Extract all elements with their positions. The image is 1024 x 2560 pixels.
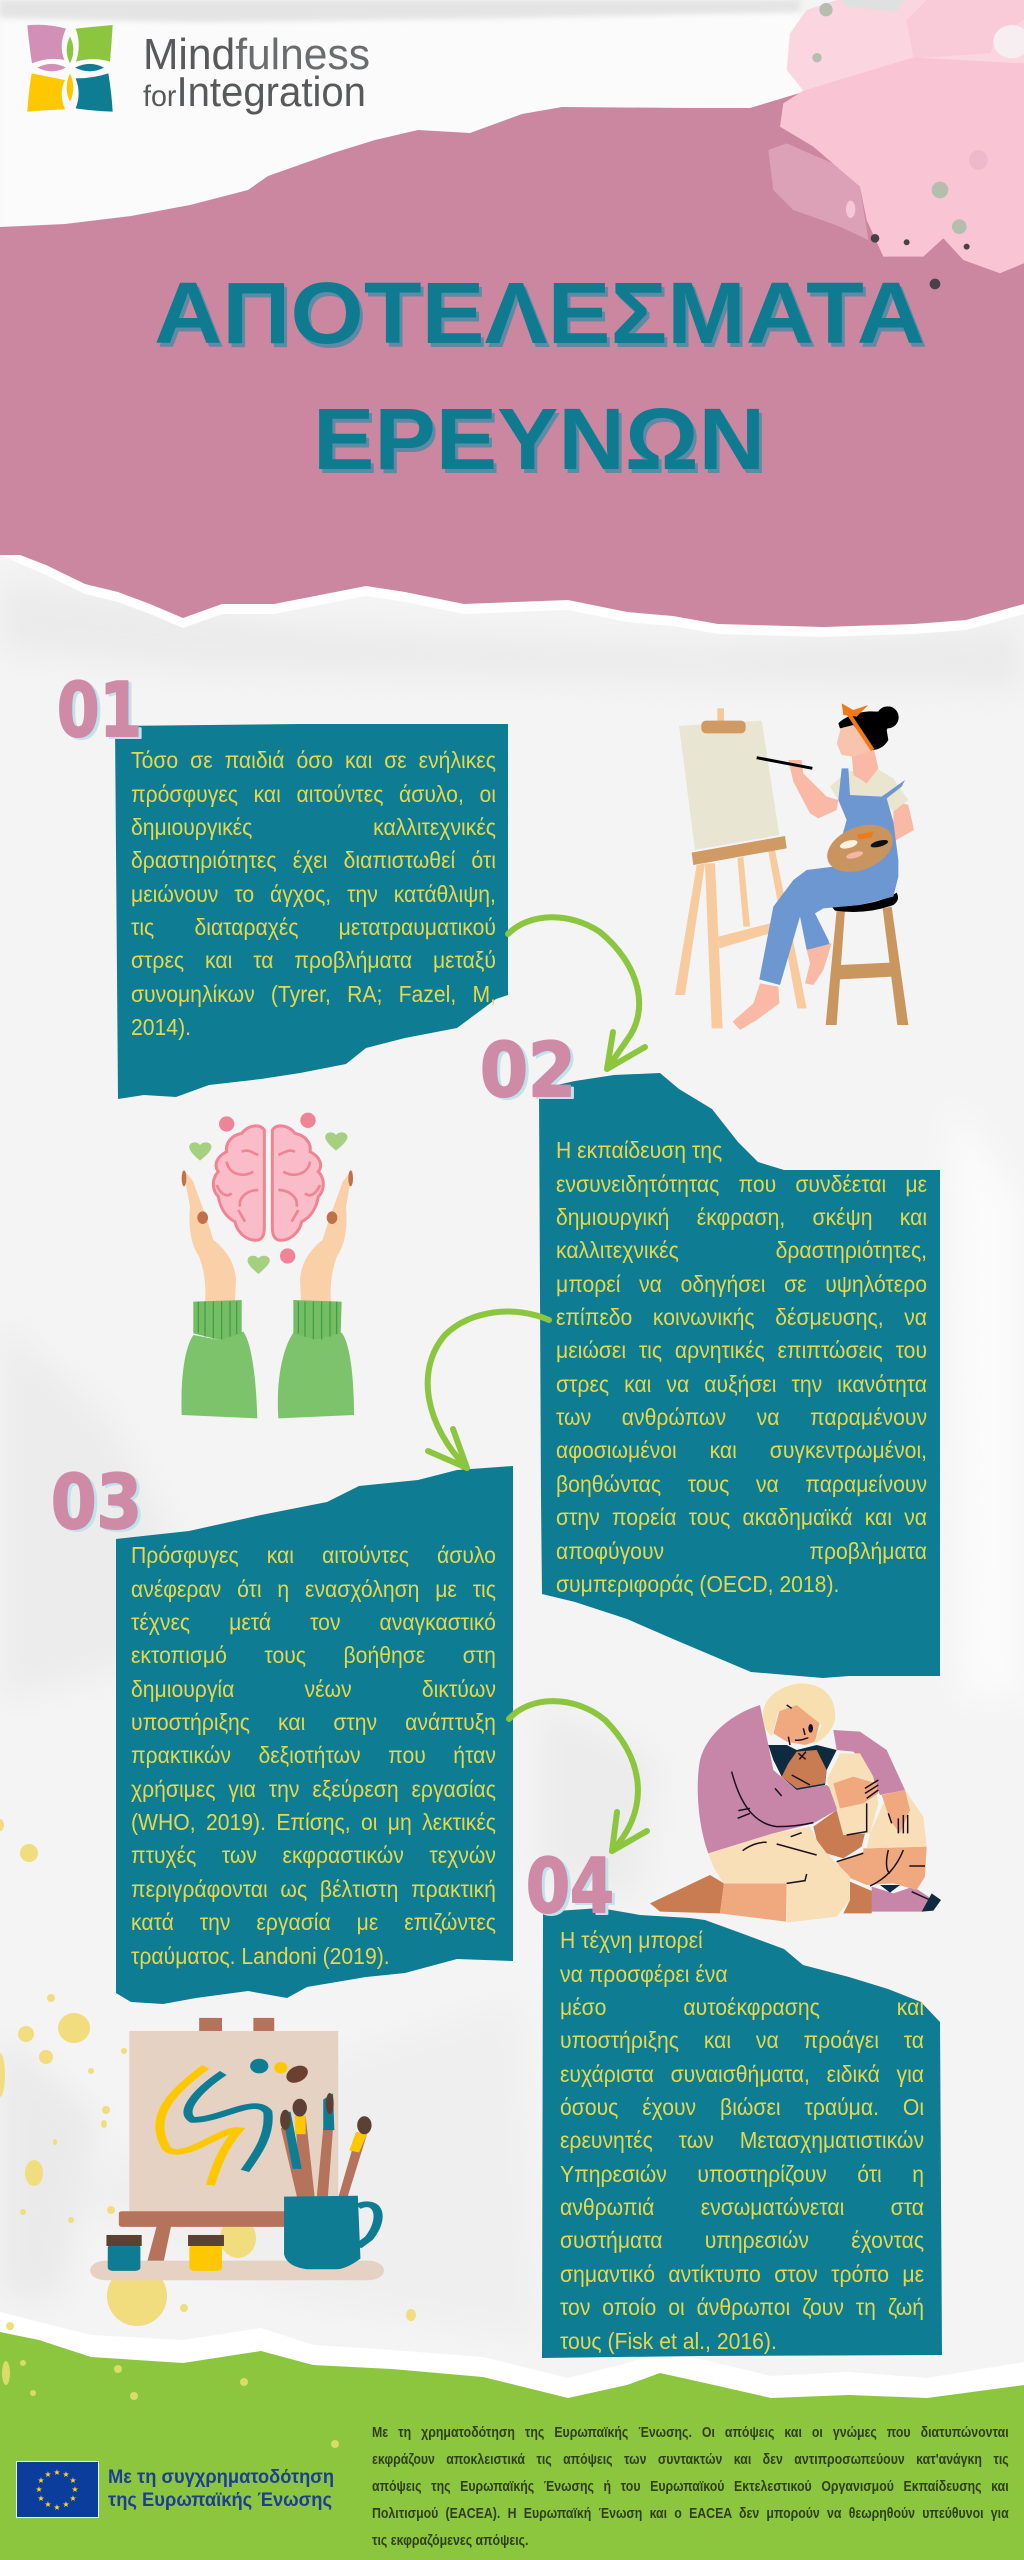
panel: 03 text: ανέφεραν ότι η ενασχόληση με τις [131,1576,496,1602]
EU flag: ★ [44,2500,52,2509]
panel: 03 text: κατά την εργασία με επιζώντες [131,1909,496,1935]
left hand [183,1170,236,1302]
panel: 04 text: ερευνητές των Μετασχηματιστικών [560,2127,924,2153]
panel: 04 text: Υπηρεσιών υποστηρίζουν ότι η [560,2161,924,2187]
arrow: 02 to 03 [428,1312,549,1468]
funding disclaimer: εκφράζουν αποκλειστικά τις απόψεις των συντακτών και δεν αντιπροσωπεύουν κατ'ανάγκη τις [372,2452,1009,2468]
torn white rim under pink band [0,540,1024,637]
funding disclaimer: απόψεις της Ευρωπαϊκής Ένωσης ή του Ευρωπαϊκού Εκτελεστικού Οργανισμού Εκπαίδευσης και [372,2479,1009,2495]
panel: 04 text: όσους έχουν βιώσει τραύμα. Οι [560,2094,924,2120]
brain [213,1126,323,1240]
EU flag [16,2461,99,2518]
number 03: 03 [51,1458,142,1546]
panel: 02 text: μειώσει τις αρνητικές επιπτώσεις του [556,1337,927,1363]
panel: 02 text: μπορεί να οδηγήσει σε υψηλότερο [556,1271,927,1297]
panel: 02 text: καλλιτεχνικές δραστηριότητες, [556,1237,927,1263]
panel: 04 text: τους (Fisk et al., 2016). [560,2328,777,2354]
panel: 02 text: των ανθρώπων να παραμένουν [556,1404,927,1430]
panel: 04 text [542,1908,942,2358]
right hand [300,1170,353,1302]
panel: 03 text: περιγράφονται ως βέλτιστη πρακτική [131,1876,496,1902]
panel: 02 text: δημιουργική έκφραση, σκέψη και [556,1204,927,1230]
panel: 01 text: συνομηλίκων (Tyrer, RA; Fazel, M, [131,981,496,1007]
panel: 03 text: Πρόσφυγες και αιτούντες άσυλο [131,1542,496,1568]
illustration: painter at easel [675,703,914,1030]
panel: 01 text: δραστηριότητες έχει διαπιστωθεί ότι [131,847,496,873]
logo wordmark [143,30,370,115]
funding disclaimer: τις εκφραζόμενες απόψεις. [372,2533,528,2549]
watercolor blot [768,0,1024,290]
panel: 03 text: χρήσιμες για την εξεύρεση εργασίας [131,1776,496,1802]
EU flag: ★ [62,2500,70,2509]
darker left wash [768,143,868,240]
EU flag: ★ [53,2468,61,2477]
title [154,270,926,488]
panel: 01 text: πρόσφυγες και αιτούντες άσυλο, οι [131,781,496,807]
EU co-funding label [108,2467,334,2511]
panel: 03 text: τραύματος. Landoni (2019). [131,1943,390,1969]
panel: 04 text: σημαντικό αντίκτυπο στον τρόπο με [560,2261,924,2287]
panel: 03 text: πτυχές των εκφραστικών τεχνών [131,1842,496,1868]
panel: 01 text: τις διαταραχές μετατραυματικού [131,914,496,940]
panel: 03 text [116,1466,513,2004]
EU flag: ★ [37,2476,45,2485]
funding disclaimer: Πολιτισμού (EACEA). Η Ευρωπαϊκή Ένωση και ο EACEA δεν μπορούν να θεωρηθούν υπεύθυνοι για [372,2506,1009,2522]
logo wordmark: forIntegration [143,68,366,115]
illustration: embracing figures [650,1683,941,1923]
EU flag: ★ [53,2503,61,2512]
panel: 03 text: υποστήριξης και στην ανάπτυξη [131,1709,496,1735]
panel: 02 text: βοηθώντας τους να παραμείνουν [556,1471,927,1497]
EU flag: ★ [35,2485,43,2494]
gold splatter [0,1741,416,2330]
panel: 02 text: στρες και να αυξήσει την ικανότητα [556,1371,927,1397]
panel: 01 text: Τόσο σε παιδιά όσο και σε ενήλικες [131,747,496,773]
panel: 01 text: μειώνουν το άγχος, την κατάθλιψη, [131,881,496,907]
panel: 03 text: εκτοπισμό τους βοήθησε στη [131,1642,496,1668]
panel: 04 text: ανθρωπιά ενσωματώνεται στα [560,2194,924,2220]
panel: 01 text: στρες και τα προβλήματα μεταξύ [131,947,496,973]
panel: 03 text: δημιουργία νέων δικτύων [131,1676,496,1702]
panel: 01 text: δημιουργικές καλλιτεχνικές [131,814,496,840]
funding disclaimer: Με τη χρηματοδότηση της Ευρωπαϊκής Ένωσης. Οι απόψεις και οι γνώμες που διατυπώνονται [372,2425,1009,2441]
EU flag: ★ [62,2470,70,2479]
pink header band [0,93,1024,627]
panel: 02 text: Η εκπαίδευση της [556,1137,722,1163]
panel: 02 text: ενσυνειδητότητας που συνδέεται με [556,1171,927,1197]
panel: 01 text: 2014). [131,1014,191,1040]
arrow: 01 to 02 [508,917,645,1069]
EU flag: ★ [37,2494,45,2503]
panel: 02 text: αποφύγουν προβλήματα [556,1538,927,1564]
illustration: canvas, brushes and paint [90,2018,384,2280]
sleeves [181,1332,257,1418]
panel: 03 text: πρακτικών δεξιοτήτων που ήταν [131,1742,496,1768]
illustration: hands holding brain [181,1112,354,1418]
main wash [780,57,1024,273]
panel: 04 text: τον οποίο οι άνθρωποι ζουν τη ζωή [560,2294,924,2320]
panel: 02 text [539,1073,940,1678]
panel: 02 text: αφοσιωμένοι και συγκεντρωμένοι, [556,1437,927,1463]
title: ΕΡΕΥΝΩΝ [313,391,765,488]
panel: 02 text: επίπεδο κοινωνικής δέσμευσης, να [556,1304,927,1330]
arrow: 03 to 04 [509,1701,647,1851]
number 04: 04 [526,1842,614,1930]
number 02: 02 [480,1026,576,1114]
EU flag: ★ [71,2485,79,2494]
logo mark [27,25,113,112]
logo wordmark: Mindfulness [143,30,370,79]
panel: 04 text: υποστήριξης και να προάγει τα [560,2027,924,2053]
upper wash [787,0,1024,91]
EU co-funding label: της Ευρωπαϊκής Ένωσης [108,2490,332,2511]
EU flag: ★ [69,2494,77,2503]
panel: 04 text: ευχάριστα συναισθήματα, ειδικά για [560,2061,924,2087]
panel: 01 text [115,724,508,1099]
green footer band [0,2332,1024,2560]
panel: 04 text: Η τέχνη μπορεί [560,1927,703,1953]
panel: 02 text: στην πορεία τους ακαδημαϊκά και να [556,1504,927,1530]
panel: 04 text: να προσφέρει ένα [560,1961,728,1987]
logo [27,24,370,115]
panel: 04 text: μέσο αυτοέκφρασης και [560,1994,924,2020]
hearts and flowers [189,1113,347,1274]
number 01: 01 [57,666,142,754]
panel: 02 text: συμπεριφοράς (OECD, 2018). [556,1571,839,1597]
EU co-funding label: Με τη συγχρηματοδότηση [108,2467,334,2488]
EU flag: ★ [44,2470,52,2479]
funding disclaimer [372,2425,1009,2549]
panel: 03 text: (WHO, 2019). Επίσης, οι μη λεκτικές [131,1809,496,1835]
torn white rim above green [0,2312,1024,2400]
panel: 03 text: τέχνες μετά τον αναγκαστικό [131,1609,496,1635]
EU flag: ★ [69,2476,77,2485]
step numbers [51,666,614,1930]
panel: 04 text: συστήματα υπηρεσιών έχοντας [560,2227,924,2253]
